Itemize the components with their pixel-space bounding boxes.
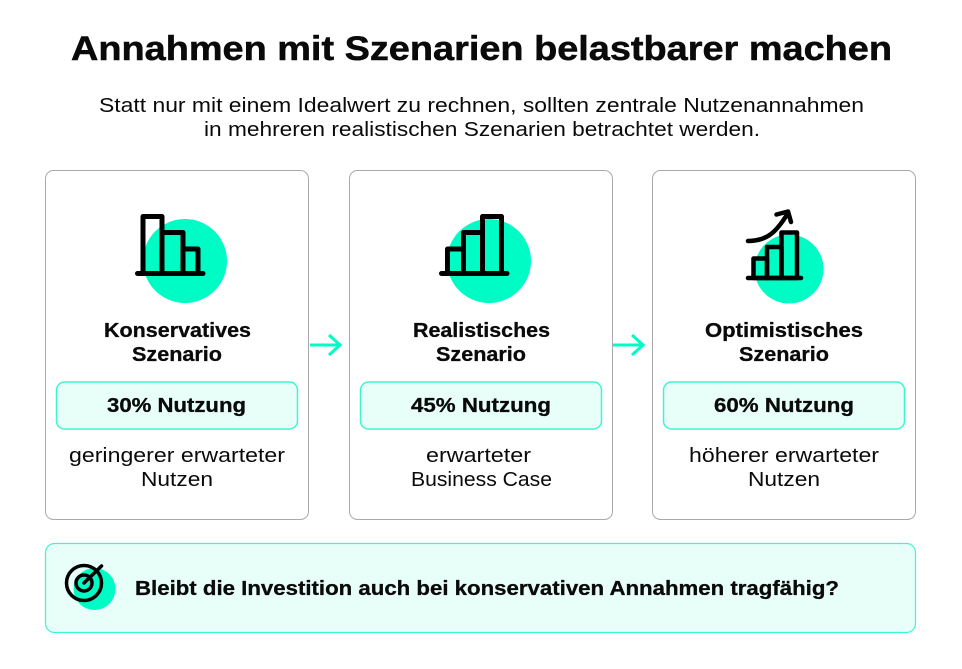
title: Annahmen mit Szenarien belastbarer machen [71,30,892,68]
heading: Realistisches [413,320,550,342]
heading: Szenario [739,344,829,366]
heading: Szenario [132,344,222,366]
heading: Optimistisches [705,320,863,342]
heading: Konservatives [104,320,251,342]
badge: 30% [56,382,298,429]
badge: 45%: 45% Nutzung [411,395,551,417]
arrow 2 [613,335,643,355]
icon: rising bars with arrow [748,212,824,304]
description: höherer erwarteter [689,445,879,467]
panel: optimistisches Szenario [652,170,916,520]
heading [413,320,550,366]
description [69,445,285,491]
description: Business Case [411,469,552,491]
icon: falling bars [138,216,227,303]
description: geringerer erwarteter [69,445,285,467]
icon: target [66,566,116,610]
heading: Szenario [436,344,526,366]
arrow 1 [310,335,340,355]
description: erwarteter [426,445,531,467]
badge: 60% [664,382,904,429]
badge: 60%: 60% Nutzung [714,395,854,417]
callout text: Bleibt die Investition auch bei konservativen Annahmen tragfähig? [135,578,839,600]
description [411,445,552,491]
subtitle [99,95,864,141]
heading [104,320,251,366]
badge: 30%: 30% Nutzung [107,395,246,417]
subtitle: Statt nur mit einem Idealwert zu rechnen, sollten zentrale Nutzenannahmen [99,95,864,117]
badge: 45% [360,382,602,429]
description: Nutzen [748,469,820,491]
panel: realistisches Szenario [350,170,612,520]
heading [705,320,863,366]
callout [46,544,916,632]
description [689,445,879,491]
panel: konservatives Szenario [46,170,308,520]
subtitle: in mehreren realistischen Szenarien betrachtet werden. [204,119,760,141]
description: Nutzen [141,469,213,491]
icon: medium bars [442,216,531,303]
